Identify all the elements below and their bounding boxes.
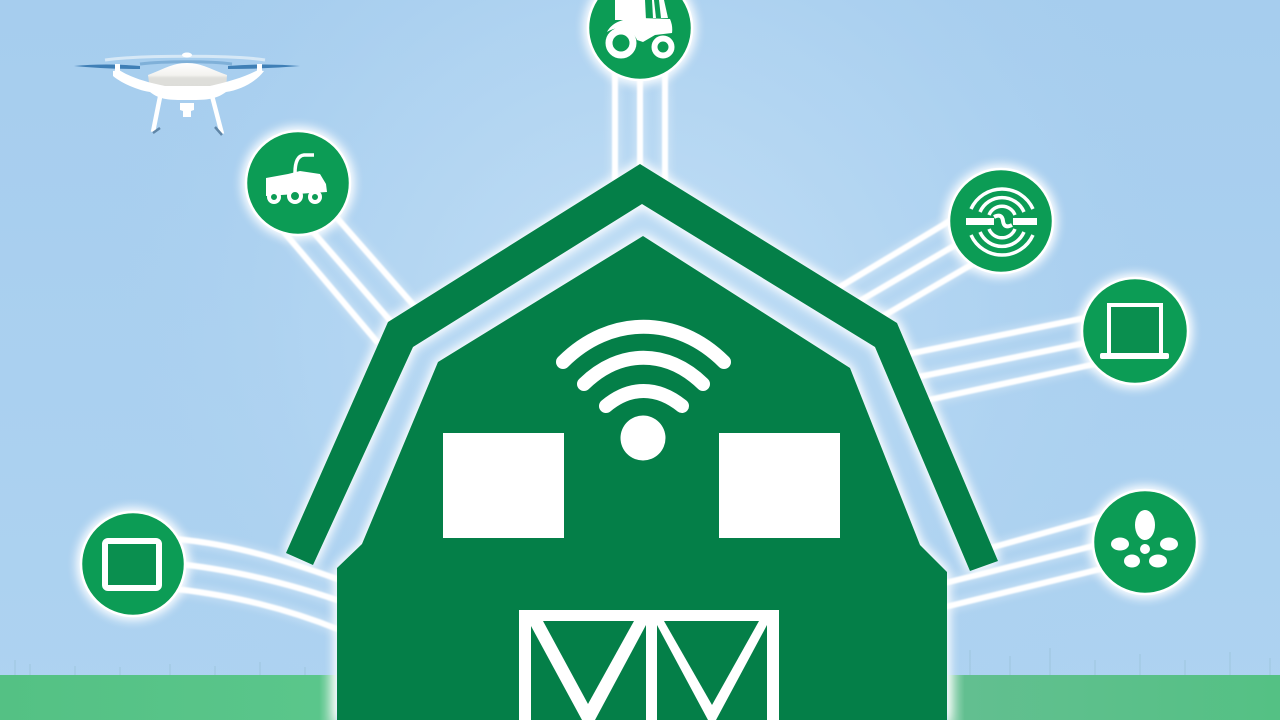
barn body bbox=[337, 236, 947, 720]
barn door bbox=[519, 610, 779, 720]
left barn window bbox=[443, 433, 564, 538]
grass strip bbox=[0, 648, 1280, 720]
icon: seed plant bbox=[1093, 490, 1197, 594]
icon: harvester bbox=[246, 131, 350, 235]
connection lines bbox=[175, 70, 1105, 630]
icon: wifi bbox=[563, 327, 724, 460]
icon: tablet bbox=[81, 512, 185, 616]
icon: tractor bbox=[588, 0, 692, 80]
drone bbox=[74, 52, 300, 135]
right barn window bbox=[719, 433, 840, 538]
icon: signal sensor bbox=[949, 169, 1053, 273]
icon: laptop bbox=[1082, 278, 1188, 384]
barn roof bbox=[286, 164, 998, 571]
